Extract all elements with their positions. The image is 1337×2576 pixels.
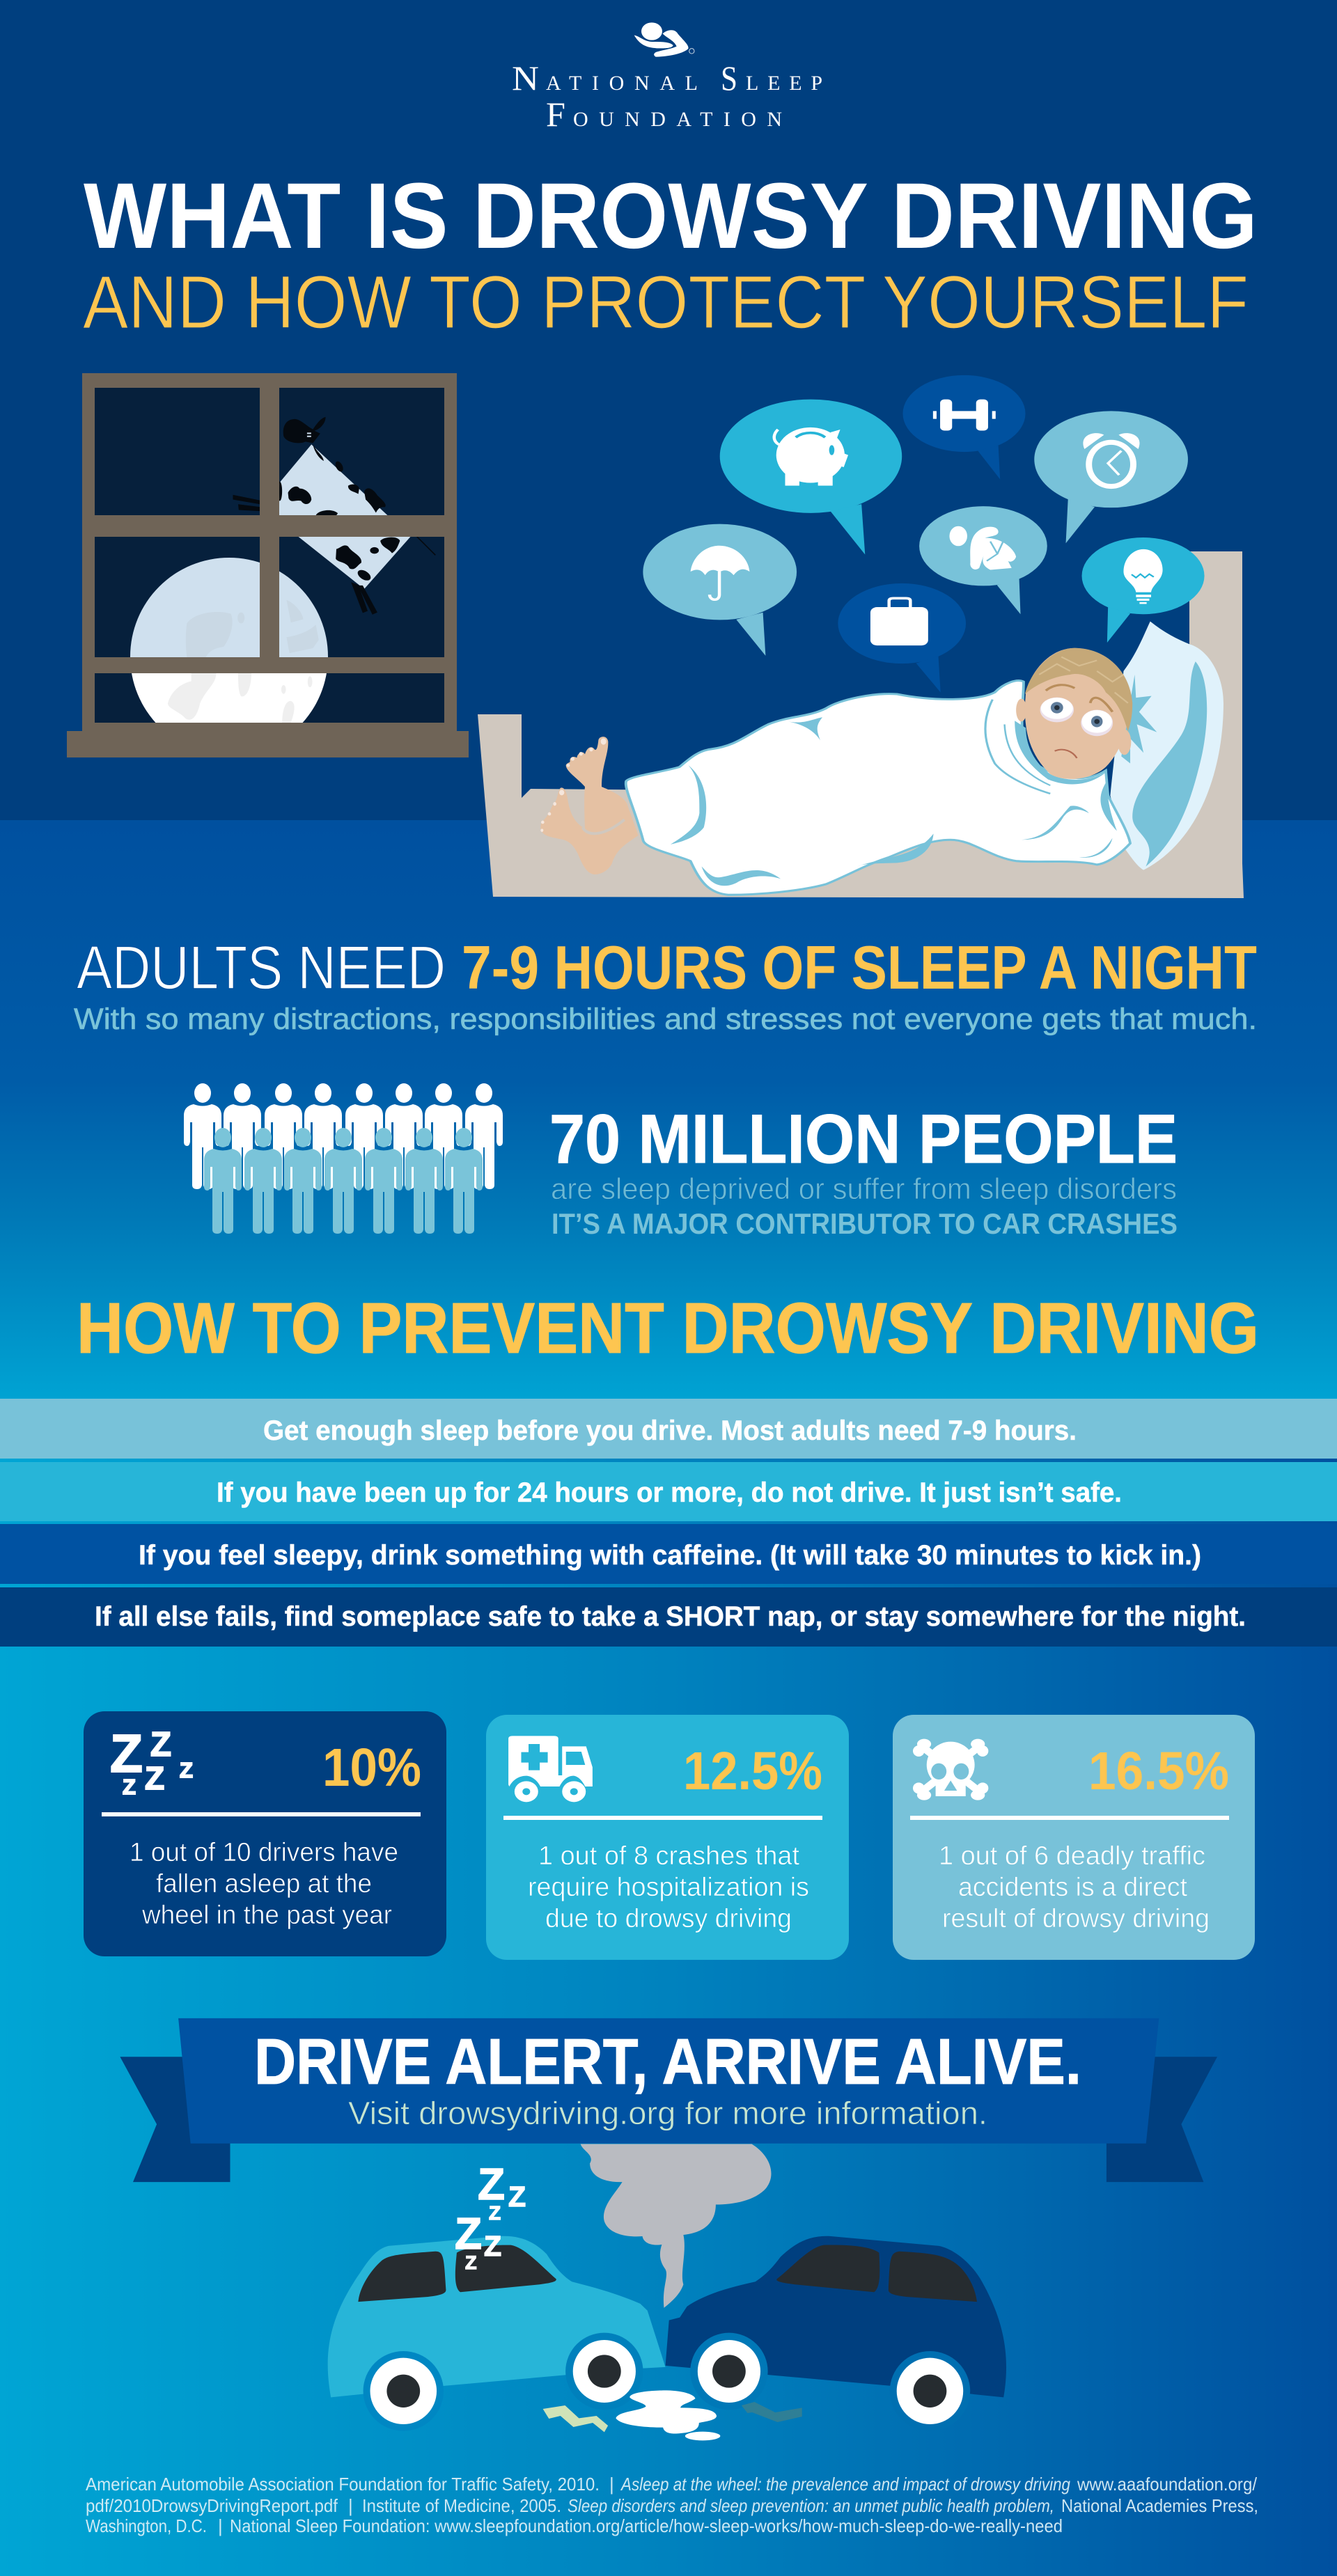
body text: result of drowsy driving [942,1904,1210,1933]
icon: sleeping Zs: Z [123,1775,136,1799]
footer: sources: National Sleep Foundation: www.sleepfoundation.org/article/how-sleep-works/how-much-sleep-do-we-really-need [230,2515,1063,2536]
window frame [67,373,469,757]
dark blue car body [666,2236,1006,2397]
footer: sources: National Academies Press, [1061,2495,1258,2516]
man's head [1016,648,1132,779]
light blue car body [328,2236,666,2397]
thought bubble: baby [919,506,1047,614]
percentage: 10% [322,1738,421,1798]
banner: drive alert, arrive alive [120,2018,1217,2182]
tip 4: If all else fails, find someplace safe to take a SHORT nap, or stay somewhere for the night. [95,1601,1246,1632]
sleeping Zs above car: Z [489,2202,501,2224]
thought bubble: alarm clock [1034,411,1188,543]
cow jumping over the moon [233,417,435,615]
subtitle: AND HOW TO PROTECT YOURSELF [83,260,1249,344]
heading: adults need 7-9 hours: ADULTS NEED [77,933,446,1002]
stat: 70 million people [549,1100,1178,1240]
percentage: 16.5% [1088,1741,1229,1801]
wheels, puddle and debris [363,2333,970,2440]
bed [478,551,1244,898]
body text: 1 out of 6 deadly traffic [939,1841,1205,1871]
footer: sources: | [218,2515,223,2536]
smoke [581,2144,771,2308]
body text: require hospitalization is [528,1873,809,1902]
stat: 70 million people: are sleep deprived or suffer from sleep disorders [551,1172,1177,1206]
moon [130,558,328,755]
footer: sources: www.aaafoundation.org/ [1077,2474,1258,2495]
banner: drive alert, arrive alive: DRIVE ALERT, ARRIVE ALIVE. [254,2025,1081,2098]
stat card: 16.5% [893,1715,1255,1960]
footer: sources: Asleep at the wheel: the prevalence and impact of drowsy driving [620,2474,1070,2495]
tip 1: Get enough sleep before you drive. Most adults need 7-9 hours. [263,1415,1077,1446]
heading: adults need 7-9 hours [77,933,1257,1002]
tip 3: If you feel sleepy, drink something with caffeine. (It will take 30 minutes to kick in.) [139,1540,1201,1571]
icon: sleeping Zs: Z [110,1724,143,1784]
icon: sleeping Zs: Z [145,1760,164,1796]
footer: sources: | [348,2495,353,2516]
footer: sources: Institute of Medicine, 2005. [362,2495,561,2516]
body text: 1 out of 8 crashes that [538,1841,799,1871]
icon: sleeping figure [634,22,694,57]
icon: sleeping Zs [110,1724,193,1799]
logo wordmark: F [546,95,565,134]
icon: ambulance [508,1736,593,1802]
body text [528,1841,809,1933]
sleeping Zs above car: Z [508,2181,526,2213]
title: WHAT IS DROWSY DRIVING [84,164,1258,268]
stat card: 12.5% [486,1715,849,1960]
sleeping Zs above car: Z [455,2208,482,2259]
icon: sleeping Zs: Z [180,1758,193,1782]
sleeping Zs above car: Z [478,2159,505,2209]
body text: wheel in the past year [141,1901,392,1930]
blanket [626,681,1130,895]
logo wordmark: ATIONAL [546,72,698,95]
logo wordmark: LEEP [746,72,822,95]
stat: 70 million people: 70 MILLION PEOPLE [549,1100,1178,1177]
icon: skull and crossbones [913,1739,988,1800]
footer: sources: pdf/2010DrowsyDrivingReport.pdf [86,2495,338,2516]
thought bubble: umbrella [643,524,797,656]
thought bubble: briefcase [838,583,966,692]
tip 1 [0,1399,1337,1459]
stat: 70 million people: IT’S A MAJOR CONTRIBUTOR TO CAR CRASHES [552,1207,1178,1240]
stat card: 10% [84,1711,446,1956]
thought bubble: dumbbell [902,375,1026,479]
body text [939,1841,1210,1933]
tip bars [0,1399,1337,1647]
footer: sources [86,2474,1258,2536]
icon: sleeping Zs: Z [150,1726,171,1764]
illustration: bed with sleepless man [478,375,1244,898]
footer: sources: Sleep disorders and sleep prevention: an unmet public health problem, [568,2495,1054,2516]
illustration: window with moon and cow [67,373,469,757]
tip 2 [0,1462,1337,1521]
text: distractions sub-heading: With so many distractions, responsibilities and stresses not everyone gets that much. [74,1003,1257,1036]
tip 4 [0,1587,1337,1647]
thought bubble: light bulb [1082,537,1205,643]
logo wordmark: S [721,58,737,97]
logo wordmark [512,58,822,134]
pillow [1110,621,1223,870]
footer: sources: American Automobile Association Foundation for Traffic Safety, 2010. [86,2474,600,2495]
sleeping Zs above car [455,2159,526,2273]
body text: accidents is a direct [958,1873,1187,1902]
pictogram: sleep-deprived people [184,1083,503,1234]
body text: due to drowsy driving [545,1904,792,1933]
logo: National Sleep Foundation [512,22,822,134]
sleeping Zs above car: Z [484,2230,501,2262]
tip 2: If you have been up for 24 hours or more, do not drive. It just isn’t safe. [217,1477,1122,1508]
thought bubble: piggy bank [720,400,902,555]
body text: 1 out of 10 drivers have [130,1838,398,1867]
feet [540,737,639,874]
footer: sources: | [609,2474,614,2495]
logo wordmark: OUNDATION [573,108,782,131]
percentage: 12.5% [683,1741,822,1801]
tip 3 [0,1524,1337,1584]
sleeping Zs above car: Z [465,2252,476,2273]
body text [130,1838,398,1930]
illustration: car crash [328,2144,1006,2440]
body text: fallen asleep at the [156,1869,372,1899]
footer: sources: Washington, D.C. [86,2515,207,2536]
logo wordmark: N [512,58,539,97]
banner: drive alert, arrive alive: Visit drowsydriving.org for more information. [348,2095,987,2131]
